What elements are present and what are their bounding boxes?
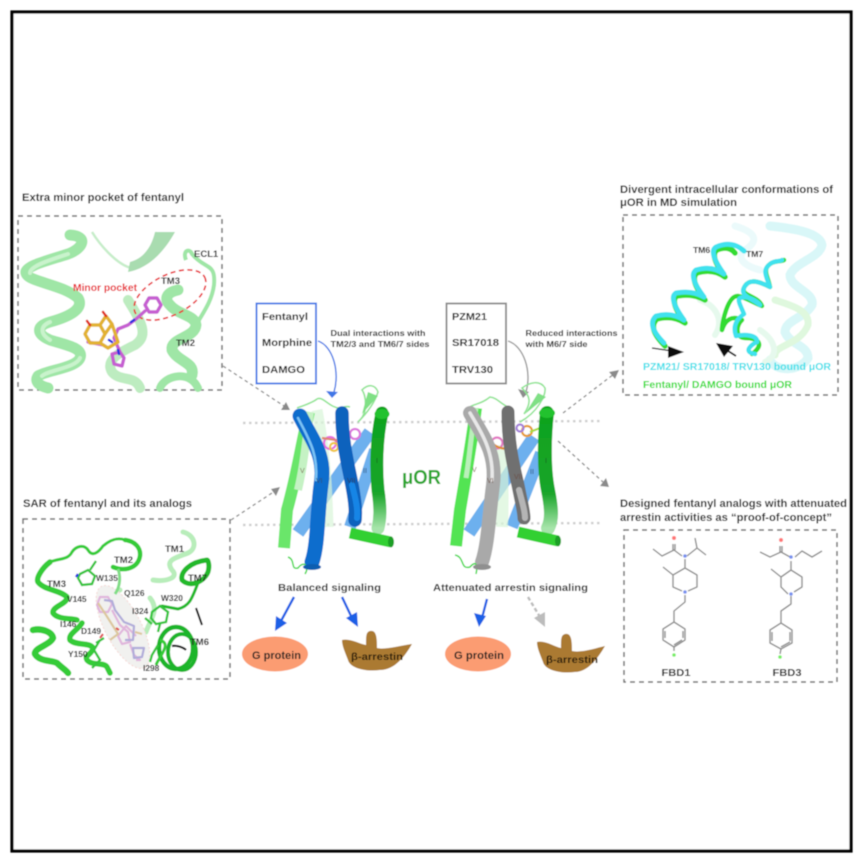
arrows	[652, 343, 736, 358]
residue and helix labels: TM2	[114, 555, 133, 566]
note: dual interactions: TM2/3 and TM6/7 sides	[330, 339, 430, 349]
note: reduced interactions	[524, 328, 618, 349]
panel: minor pocket of fentanyl	[18, 216, 222, 390]
note: reduced interactions: with M6/7 side	[524, 339, 588, 349]
panel: SAR of fentanyl	[23, 519, 230, 679]
helix light blue II/III	[469, 437, 541, 533]
note: dual interactions	[330, 328, 430, 349]
helix: TM6 cyan	[652, 244, 744, 343]
faint ribbons	[105, 532, 194, 632]
pocket ellipse	[126, 259, 214, 331]
residue and helix labels: V145	[67, 594, 87, 604]
ligand box: balanced: DAMGO	[262, 365, 305, 376]
helix I	[374, 409, 390, 528]
helix: TM6 green	[653, 248, 735, 346]
arrow: balanced ligands to receptor	[318, 341, 338, 398]
ligand sticks	[85, 298, 161, 366]
helix I: I	[376, 458, 378, 465]
ligand box: attenuated: SR17018	[452, 338, 499, 349]
residue and helix labels: I146	[60, 619, 77, 629]
note: dual interactions: Dual interactions with	[330, 328, 426, 338]
G protein: balanced	[242, 636, 308, 672]
signaling label: balanced: Balanced signaling	[278, 582, 381, 594]
helix VII: VII	[514, 474, 523, 481]
labels: TM and ECL	[161, 249, 219, 349]
residue and helix labels: TM6	[190, 637, 209, 648]
helix: centre	[110, 300, 143, 388]
helix I: I	[545, 458, 547, 465]
arrow: balanced to G protein	[275, 597, 294, 631]
helix VI: VI	[487, 478, 494, 485]
helix 8	[518, 532, 561, 546]
labels: TM6	[693, 245, 710, 255]
lead arrow: SAR to receptor	[231, 487, 280, 520]
residue and helix labels: I298	[143, 663, 160, 673]
arrow: balanced to arrestin	[342, 597, 358, 627]
membrane lines	[243, 421, 602, 525]
residue and helix labels	[47, 544, 209, 673]
residue and helix labels: W320	[161, 593, 183, 603]
lead arrow: receptor to analogs	[558, 441, 609, 487]
ligand box: attenuated	[446, 304, 506, 384]
helix VII	[508, 412, 534, 518]
helix light blue II/III	[298, 432, 375, 533]
loop below	[288, 557, 307, 574]
receptor: attenuated	[455, 383, 561, 574]
legend: cyan: PZM21/ SR17018/ TRV130 bound μOR	[643, 362, 832, 373]
lead arrow: receptor to MD panel	[563, 370, 619, 413]
residue and helix labels: I324	[132, 606, 149, 616]
beta-arrestin: balanced: β-arrestin	[351, 651, 403, 663]
beta-arrestin: balanced	[342, 631, 412, 671]
faint background helices	[700, 226, 822, 369]
panel title: designed analogs: Designed fentanyl analogs with attenuated	[620, 498, 847, 510]
helix VII: II	[363, 468, 367, 475]
arrow: attenuated ligands to receptor	[508, 341, 529, 398]
helix VII: VII	[347, 478, 356, 485]
residue and helix labels: TM1	[165, 544, 185, 555]
helix: TM7 green	[722, 260, 784, 354]
panel title: MD simulation: Divergent intracellular conformations of	[620, 184, 833, 196]
G protein: attenuated: G protein	[454, 650, 504, 662]
labels: TM and ECL: TM2	[176, 338, 195, 349]
ligand shadow	[86, 578, 160, 676]
helix 8	[350, 533, 394, 548]
residue and helix labels: TM3	[47, 579, 66, 590]
loops	[297, 386, 378, 422]
arrow: attenuated to arrestin (dashed)	[528, 597, 545, 627]
ligand mix	[322, 429, 360, 451]
receptor: balanced	[284, 386, 394, 574]
G protein: attenuated	[445, 636, 511, 672]
label: minor pocket: Minor pocket	[73, 283, 138, 294]
panel: MD simulation conformations	[623, 215, 838, 395]
note: reduced interactions: Reduced interactions	[526, 328, 618, 338]
helix: left	[26, 235, 82, 388]
ligand box: attenuated: TRV130	[452, 365, 493, 376]
residue and helix labels: Y150	[68, 649, 88, 659]
labels: TM and ECL: TM3	[161, 276, 180, 287]
loop below	[455, 555, 477, 574]
helix faint	[500, 445, 503, 527]
ligand box: balanced: Morphine	[262, 338, 312, 349]
molecule: FBD1	[653, 536, 706, 657]
panel: designed analogs	[624, 530, 837, 682]
helix VI	[298, 416, 323, 562]
helix V	[456, 408, 477, 546]
ligand mix	[490, 424, 540, 449]
lead arrow: minor pocket to receptor	[223, 366, 290, 410]
ligand box: balanced	[256, 304, 316, 384]
signaling label: attenuated: Attenuated arrestin signaling	[433, 582, 588, 594]
residue and helix labels: TM7	[188, 573, 207, 584]
legend: green: Fentanyl/ DAMGO bound μOR	[643, 380, 793, 391]
ribbons: TM2 and TM3	[33, 539, 140, 673]
residue and helix labels: D149	[81, 626, 101, 636]
label: FBD3: FBD3	[772, 667, 802, 679]
residue sticks	[76, 561, 168, 668]
residue and helix labels: Q126	[124, 588, 145, 598]
G protein: balanced: G protein	[252, 650, 301, 662]
labels	[693, 245, 763, 259]
helix faint	[317, 410, 328, 527]
label: FBD1: FBD1	[662, 667, 691, 679]
panel title: extra minor pocket: Extra minor pocket of fentanyl	[22, 192, 184, 204]
helix VI	[470, 413, 494, 562]
panel title: MD simulation: μOR in MD simulation	[620, 197, 737, 209]
ligands overlay	[97, 597, 144, 660]
helix I	[539, 408, 555, 528]
residue and helix labels: W135	[96, 573, 118, 583]
panel title: designed analogs: arrestin activities as “proof-of-concept”	[620, 512, 832, 524]
helix V: V	[472, 467, 477, 474]
helix VII	[342, 413, 367, 520]
beta-arrestin: attenuated	[537, 634, 605, 673]
helix V: V	[300, 468, 305, 475]
panel title: MD simulation	[620, 184, 833, 209]
panel title: SAR: SAR of fentanyl and its analogs	[23, 498, 192, 510]
ligand box: attenuated: PZM21	[452, 312, 487, 323]
helix VI: VI	[316, 478, 323, 485]
molecule: FBD3	[760, 538, 822, 659]
helix: TM3 and TM2	[160, 251, 214, 388]
ribbons: TM6 and TM7	[156, 560, 209, 670]
arrow: attenuated to G protein	[474, 599, 487, 627]
panel title: designed analogs	[620, 498, 847, 524]
helix: TM7 cyan	[735, 260, 782, 354]
labels: TM7	[746, 249, 763, 259]
helix VII: II	[530, 469, 534, 476]
beta-arrestin: attenuated: β-arrestin	[546, 654, 598, 666]
helix V	[284, 412, 310, 548]
receptor label: μOR	[402, 467, 442, 489]
labels: TM and ECL: ECL1	[194, 249, 219, 260]
ligand box: balanced: Fentanyl	[262, 312, 308, 323]
